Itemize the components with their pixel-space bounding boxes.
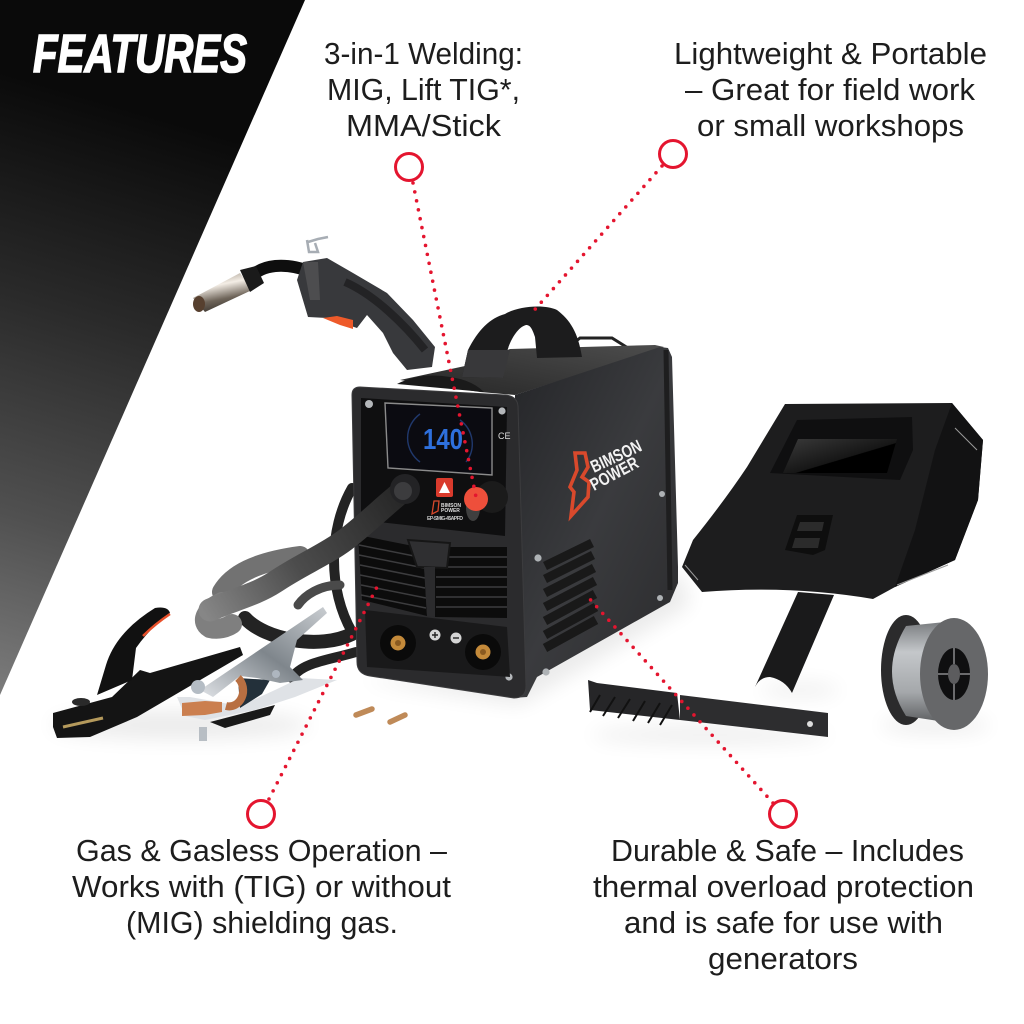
- model number: EP-SMIG-45APFD: [427, 516, 463, 522]
- machine: welder: [352, 307, 678, 698]
- back cables: [245, 488, 356, 678]
- callout text: Gas & Gasless Operation –: [76, 834, 447, 868]
- ventilation grille: [358, 535, 507, 618]
- callout text: [674, 37, 987, 143]
- front flange: [920, 618, 988, 730]
- front logo: [432, 501, 461, 514]
- plus terminal icon: [430, 630, 440, 640]
- wire drum: [892, 622, 945, 722]
- dotted leader: [588, 597, 773, 803]
- torch clip: [307, 237, 328, 252]
- clamp bolts: [191, 680, 205, 694]
- side screws: [534, 491, 665, 676]
- mask clip edges: [685, 428, 977, 585]
- callout text: [324, 37, 523, 143]
- rear flange: [881, 615, 931, 725]
- callout text: MMA/Stick: [346, 109, 502, 143]
- contact tips: [356, 709, 405, 722]
- logo name bottom: POWER: [586, 452, 642, 495]
- torch trigger: [323, 316, 353, 329]
- control labels: CE: [498, 431, 511, 441]
- front top handle: [397, 376, 484, 392]
- callout text: generators: [708, 942, 858, 976]
- clamp upper jaw: [200, 607, 327, 697]
- wire spool: [881, 615, 988, 730]
- dotted leader: [269, 585, 378, 799]
- icon: MIG torch: [193, 237, 435, 370]
- callout text: [72, 834, 452, 940]
- hose socket: [390, 474, 420, 504]
- dotted leader: [413, 183, 476, 497]
- marker circle: [396, 154, 422, 180]
- top handle rear: [575, 338, 628, 348]
- background band with gradient: [0, 0, 305, 695]
- floor shadows: [50, 570, 990, 743]
- control panel: [361, 398, 507, 536]
- warning icon: [436, 478, 453, 497]
- side logo: [570, 436, 645, 516]
- callout text: or small workshops: [697, 109, 964, 143]
- clamp copper: [182, 701, 222, 716]
- callout text: (MIG) shielding gas.: [126, 906, 398, 940]
- marker circle: [660, 140, 686, 168]
- callout: lightweight and portable: [530, 37, 987, 315]
- logo mark: [570, 453, 589, 516]
- callout text: 3-in-1 Welding:: [324, 37, 523, 71]
- front bezel: [352, 387, 526, 698]
- marker circle: [770, 800, 796, 828]
- torch nozzle: [193, 266, 264, 312]
- main hose: [210, 474, 420, 610]
- callout text: Lightweight & Portable: [674, 37, 987, 71]
- callout: 3-in-1 welding: [324, 37, 523, 497]
- display reading: 140: [423, 424, 463, 456]
- clamp lower jaw: [177, 678, 337, 720]
- callout text: – Great for field work: [685, 73, 976, 107]
- electrode holder: [53, 608, 243, 738]
- control knob: [464, 481, 508, 521]
- welding mask: [682, 403, 983, 693]
- dotted leader: [530, 166, 662, 315]
- lower socket panel: [365, 610, 510, 677]
- marker circle: [248, 800, 274, 828]
- callout: gas and gasless: [72, 585, 452, 940]
- brush head: [588, 680, 680, 720]
- front logo: POWER: [441, 508, 460, 514]
- side panel: [512, 347, 678, 698]
- mask side: [895, 403, 983, 587]
- carrying handle: [462, 307, 582, 378]
- ground clamp: [177, 607, 337, 741]
- logo name top: BIMSON: [587, 436, 645, 477]
- output socket left: [380, 625, 416, 661]
- holder jaw: [63, 718, 103, 727]
- display arc: [408, 414, 472, 462]
- holder lever: [97, 608, 170, 695]
- brush handle: [680, 695, 828, 737]
- wire brush: [588, 680, 828, 737]
- mask stand: [755, 592, 834, 693]
- brush bristles: [590, 695, 672, 725]
- gray coiled hose loop: [205, 556, 300, 629]
- callout text: and is safe for use with: [624, 906, 943, 940]
- display screen: [385, 403, 492, 475]
- callout: durable and safe: [588, 597, 974, 976]
- front logo: BIMSON: [441, 503, 461, 509]
- clamp opening: [238, 678, 270, 708]
- callout text: [593, 834, 974, 976]
- title: FEATURES: [33, 24, 247, 84]
- output socket right: [465, 634, 501, 670]
- callout text: thermal overload protection: [593, 870, 974, 904]
- top surface: [400, 345, 664, 395]
- callout text: Durable & Safe – Includes: [611, 834, 964, 868]
- callout text: Works with (TIG) or without: [72, 870, 452, 904]
- mask vent: [785, 515, 833, 555]
- mask window: [770, 417, 913, 480]
- torch neck: [250, 266, 312, 278]
- callout text: MIG, Lift TIG*,: [327, 73, 520, 107]
- front screws: [365, 400, 513, 681]
- hub: [938, 648, 970, 700]
- torch handle: [297, 258, 435, 370]
- clamp coil: [226, 678, 243, 706]
- side vents: [545, 543, 596, 648]
- minus terminal icon: [450, 632, 462, 644]
